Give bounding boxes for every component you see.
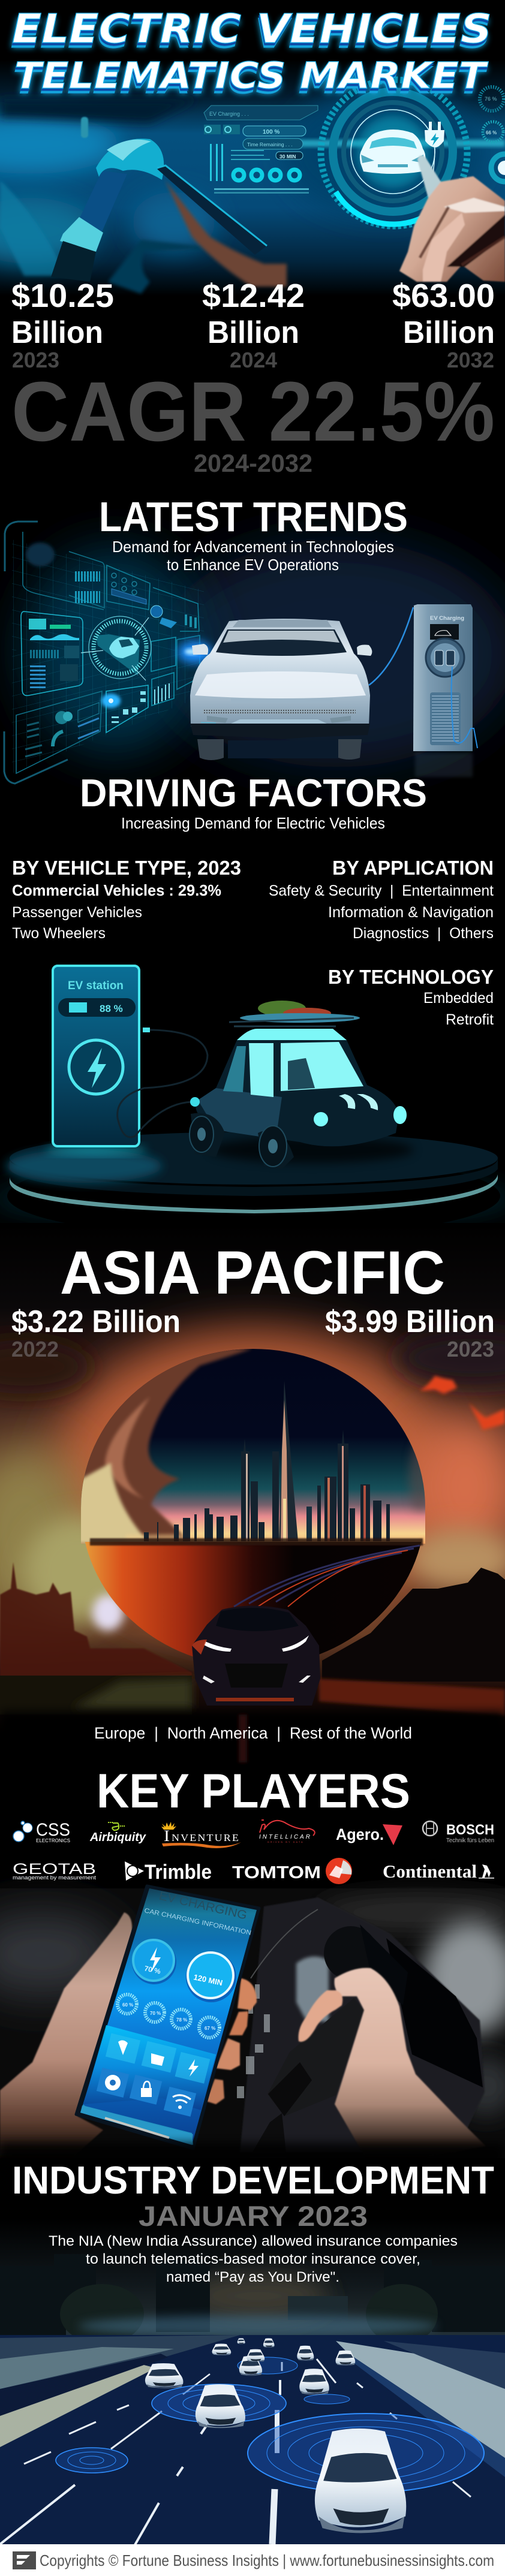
illustration: white EV front view	[185, 619, 372, 760]
heading: latest trends: to Enhance EV Operations	[167, 556, 339, 574]
smartphone screen: 120 MIN	[193, 1972, 224, 1987]
HUD info panel: Time Remaining . . .	[247, 141, 293, 147]
illustration: EV charging station: EV Charging	[430, 615, 464, 622]
logo: CSS Electronics	[13, 1820, 70, 1843]
stat 2023	[325, 1304, 495, 1361]
connected cars	[145, 2338, 406, 2533]
heading: latest trends: LATEST TRENDS	[99, 493, 408, 540]
logo: CSS Electronics: CSS	[36, 1820, 70, 1840]
stat 2023: 2023	[447, 1337, 494, 1361]
smartphone screen: 78 %	[176, 2017, 187, 2023]
HUD info panel: 30 MIN	[279, 153, 296, 159]
tablet and hand	[157, 165, 287, 287]
road surface	[0, 2335, 505, 2545]
development description	[49, 2233, 458, 2285]
logo: Airbiquity: Airbiquity	[89, 1831, 146, 1844]
smartphone screen: EV CHARGING	[158, 1889, 248, 1923]
gun hand	[299, 1968, 486, 2158]
segment: by application: Information & Navigation	[328, 904, 494, 921]
logo: Inventure	[161, 1822, 241, 1848]
stat 2032: 2032	[447, 348, 494, 372]
logo: Airbiquity	[89, 1822, 146, 1844]
HUD info panel: 100 %	[263, 129, 279, 135]
company logos	[13, 1820, 494, 1884]
logo: Agero: Agero.	[336, 1825, 384, 1843]
icon: charging plug	[425, 122, 444, 174]
smartphone screen: 67 %	[205, 2026, 215, 2031]
illustration: EV station and car on platform	[0, 966, 505, 1238]
logo: Continental: Continental	[383, 1861, 477, 1882]
smartphone screen: 70 %	[143, 1964, 161, 1976]
heading: latest trends: Demand for Advancement in Technologies	[112, 538, 394, 556]
stat 2023: $3.99 Billion	[325, 1304, 495, 1339]
small HUD gauges: 76 %	[485, 96, 497, 102]
HUD info panel: EV Charging . . .	[209, 111, 249, 117]
logo: Intellicar: INTELLICAR	[259, 1834, 312, 1840]
futuristic skyline	[144, 1381, 390, 1541]
smartphone screen	[76, 1886, 259, 2149]
logo: Agero	[336, 1824, 402, 1845]
left hand	[0, 1912, 257, 2158]
title	[12, 5, 492, 97]
segment: by technology: Embedded	[423, 990, 494, 1007]
development description: to launch telematics-based motor insurance cover,	[86, 2251, 420, 2267]
small HUD gauges	[480, 87, 505, 182]
segment: by application: BY APPLICATION	[332, 857, 494, 879]
segment: by vehicle type: Two Wheelers	[12, 925, 106, 942]
smartphone screen: CAR CHARGING INFORMATION	[143, 1907, 252, 1937]
logo: Trimble: Trimble	[145, 1861, 212, 1884]
heading: industry development: JANUARY 2023	[139, 2200, 368, 2232]
heading: Asia Pacific: ASIA PACIFIC	[60, 1239, 445, 1307]
segment: by vehicle type	[12, 857, 241, 942]
HUD ring with car	[321, 80, 467, 226]
logo: Inventure: I	[164, 1827, 170, 1845]
illustration: smart road with connected cars	[0, 2218, 505, 2545]
illustration: Asia Pacific planet and city	[0, 1223, 505, 1762]
gear shifter	[51, 138, 164, 282]
segment: by application: Safety & Security | Entertainment	[269, 882, 494, 899]
HUD data panels	[4, 522, 204, 784]
heading: Asia Pacific	[11, 1239, 495, 1361]
stat 2022: $3.22 Billion	[11, 1304, 181, 1339]
segment: by vehicle type: Passenger Vehicles	[12, 904, 142, 921]
floating island	[85, 1537, 424, 1657]
logo: Intellicar	[259, 1820, 315, 1843]
smartphone screen: 60 %	[122, 2002, 133, 2008]
EV station: EV station	[68, 980, 124, 992]
lane markings	[0, 2359, 471, 2545]
logo: CSS Electronics: ELECTRONICS	[36, 1838, 70, 1843]
telemetry dial	[81, 616, 151, 680]
stat 2024: Billion	[208, 315, 299, 350]
logo: Intellicar: DRIVEN BY DATA	[267, 1840, 304, 1843]
market size stats	[11, 277, 495, 372]
logo: Bosch: BOSCH	[446, 1822, 494, 1838]
CAGR figure: 2024-2032	[194, 449, 312, 477]
other regions: Europe | North America | Rest of the World	[94, 1724, 412, 1742]
development description: The NIA (New India Assurance) allowed insurance companies	[49, 2233, 458, 2249]
icon: car in HUD	[360, 129, 425, 174]
heading: latest trends	[99, 493, 408, 574]
logo: Bosch: Technik fürs Leben	[446, 1837, 494, 1844]
planet	[78, 1346, 429, 1547]
logo: Geotab: management by measurement	[13, 1875, 97, 1881]
heading: driving factors: DRIVING FACTORS	[80, 771, 427, 815]
segment: by vehicle type: Commercial Vehicles : 29.3%	[12, 881, 221, 899]
stat 2024: $12.42	[202, 277, 305, 314]
pointing hand	[399, 155, 505, 282]
stat 2032: Billion	[403, 315, 495, 350]
stat 2023: Billion	[11, 315, 103, 350]
car front view	[192, 1605, 320, 1706]
HUD info panel	[204, 106, 318, 194]
stat 2032: $63.00	[392, 277, 495, 314]
heading: industry development: INDUSTRY DEVELOPMENT	[12, 2158, 494, 2202]
segment: by application: Diagnostics | Others	[353, 925, 494, 942]
latest trends illustration	[4, 522, 505, 784]
logo: Geotab: GEOTAB	[13, 1861, 96, 1878]
illustration: hands with EV charging app	[0, 1886, 505, 2167]
title: ELECTRIC VEHICLES	[12, 5, 492, 52]
heading: driving factors: Increasing Demand for Electric Vehicles	[121, 814, 385, 832]
segment: by technology: BY TECHNOLOGY	[328, 966, 494, 988]
segment: by technology: Retrofit	[446, 1011, 494, 1028]
signal rings	[56, 2357, 484, 2493]
heading: key players: KEY PLAYERS	[97, 1764, 410, 1818]
icon: Fortune Business Insights logo	[13, 2551, 36, 2569]
small HUD gauges: 66 %	[486, 130, 497, 135]
stat 2022: 2022	[11, 1337, 59, 1361]
stat 2032	[392, 277, 495, 372]
EV station	[45, 966, 208, 1155]
footer	[0, 2544, 505, 2576]
stat 2023: 2023	[12, 348, 59, 372]
segment: by application	[269, 857, 494, 942]
stat 2023	[11, 277, 114, 372]
title: TELEMATICS MARKET	[14, 55, 489, 97]
logo: Geotab	[13, 1861, 97, 1881]
stat 2024: 2024	[230, 348, 277, 372]
segment: by vehicle type: BY VEHICLE TYPE, 2023	[12, 857, 241, 879]
heading: driving factors	[80, 771, 427, 832]
logo: TomTom	[232, 1858, 352, 1884]
electric car	[190, 1001, 414, 1169]
EV station: 88 %	[100, 1003, 123, 1014]
city silhouettes	[0, 1562, 505, 1762]
stat 2022	[11, 1304, 181, 1361]
logo: Inventure: NVENTURE	[172, 1832, 240, 1843]
illustration: EV charging station	[369, 604, 477, 777]
development description: named “Pay as You Drive".	[166, 2269, 339, 2285]
segment: by technology	[328, 966, 494, 1028]
logo: Bosch	[423, 1821, 494, 1844]
stat 2023: $10.25	[11, 277, 114, 314]
EV charger gun and car port	[237, 1897, 485, 2158]
heading: industry development	[12, 2158, 494, 2232]
logo: TomTom: TOMTOM	[232, 1863, 321, 1882]
stat 2024	[202, 277, 305, 372]
hero illustration: EV dashboard with HUD	[0, 60, 505, 306]
smartphone screen: 70 %	[150, 2011, 161, 2016]
